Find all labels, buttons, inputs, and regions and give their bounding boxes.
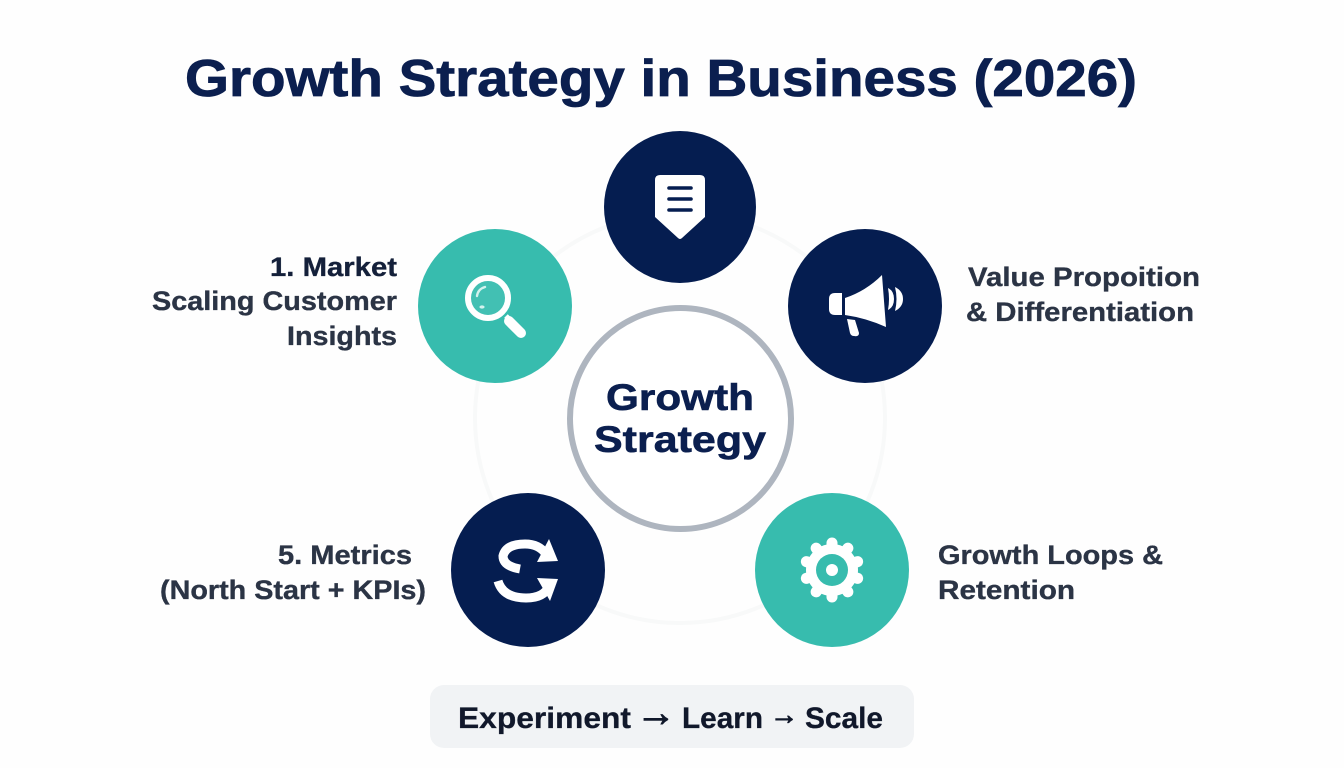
label: growth loops: Growth Loops &	[938, 540, 1163, 570]
node: market insights	[418, 229, 572, 383]
icon: document tag	[655, 175, 705, 239]
label: metrics	[160, 540, 426, 605]
title: Growth Strategy in Business (2026)	[185, 50, 1137, 108]
icon: gear	[806, 543, 858, 597]
icon: megaphone	[829, 275, 903, 336]
label: market insights: Insights	[287, 321, 397, 351]
icon: magnifying glass	[468, 278, 521, 333]
callout: experiment learn scale: →	[636, 691, 676, 735]
icon: refresh arrows	[498, 539, 558, 601]
center hub	[570, 308, 791, 529]
label: growth loops	[938, 540, 1163, 605]
callout: experiment learn scale	[430, 685, 914, 748]
label: metrics: 5. Metrics	[278, 540, 412, 570]
node: value proposition	[788, 229, 942, 383]
center label	[594, 377, 766, 460]
callout: experiment learn scale: Learn	[682, 702, 763, 735]
callout: experiment learn scale: Scale	[805, 702, 883, 735]
center label: Strategy	[594, 419, 766, 460]
label: market insights	[152, 252, 398, 351]
label: value proposition	[966, 262, 1200, 327]
node: metrics	[451, 493, 605, 647]
label: value proposition: Value Propoition	[968, 262, 1200, 292]
callout: experiment learn scale: →	[770, 699, 798, 730]
node: top document tag	[604, 131, 756, 283]
label: market insights: 1. Market	[270, 252, 397, 282]
center label: Growth	[606, 377, 754, 418]
node: growth loops	[755, 493, 909, 647]
label: metrics: (North Start + KPIs)	[160, 575, 426, 605]
label: market insights: Scaling Customer	[152, 286, 398, 316]
label: value proposition: & Differentiation	[966, 297, 1194, 327]
callout: experiment learn scale: Experiment	[458, 702, 631, 735]
label: growth loops: Retention	[938, 575, 1075, 605]
